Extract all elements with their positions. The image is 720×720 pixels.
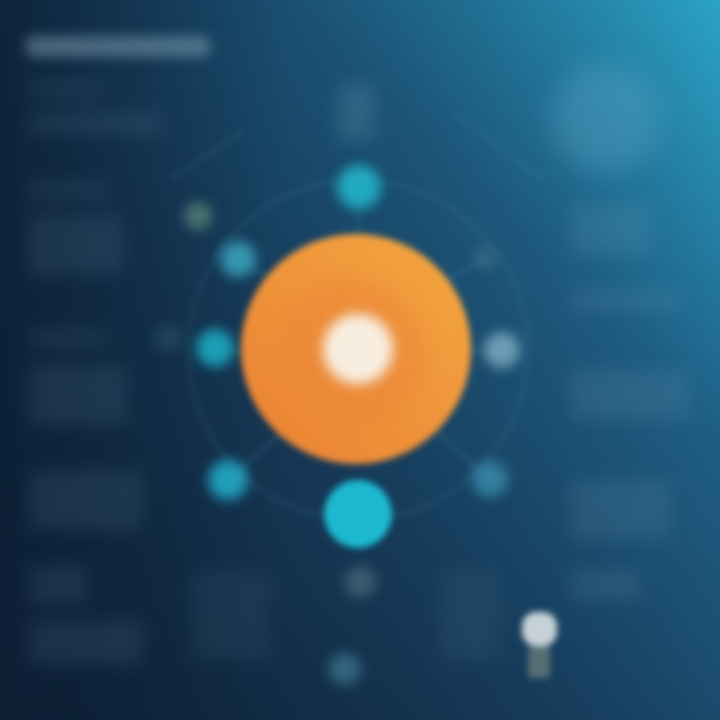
title bar <box>26 36 210 57</box>
outer connecting ring <box>170 115 545 520</box>
icon: light bulb <box>522 612 557 678</box>
node: left inner faint <box>154 324 182 352</box>
decorative top right circle <box>552 64 660 172</box>
panel: left text column <box>28 82 163 665</box>
spokes <box>215 190 500 480</box>
top centre label <box>338 85 374 140</box>
node: lower right blue <box>472 461 508 497</box>
node: right pale <box>484 332 520 368</box>
panel: right text column <box>570 205 690 600</box>
panel: lower centre text blocks <box>190 570 500 660</box>
white centre <box>323 314 393 384</box>
central orange disc <box>241 234 471 464</box>
node: left upper teal <box>220 241 256 277</box>
node: upper right faint <box>474 246 498 270</box>
node: lower grey <box>344 566 376 598</box>
node: left teal <box>196 329 234 367</box>
node: bottom faint teal <box>329 653 361 685</box>
node: lower left teal <box>208 460 248 500</box>
node: upper left olive <box>184 202 212 230</box>
inner orange ring <box>275 279 425 429</box>
node: bottom large teal <box>324 480 392 548</box>
node: top teal <box>337 165 381 209</box>
